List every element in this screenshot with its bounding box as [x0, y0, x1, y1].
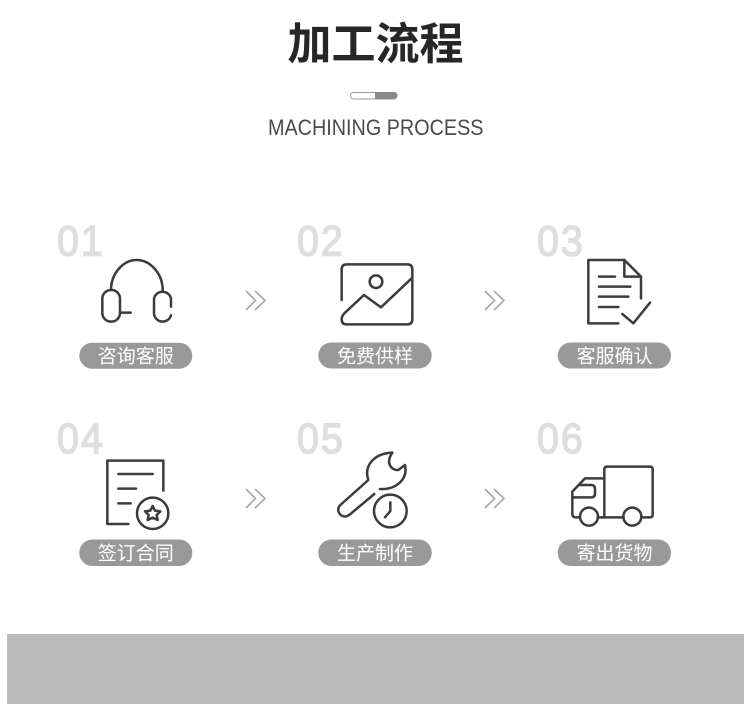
step number: 06: [537, 414, 585, 462]
label pill: [558, 540, 671, 566]
step number: 01: [57, 217, 105, 265]
step 05: production: [297, 414, 432, 566]
step 04: sign contract: [57, 414, 192, 566]
label pill: 生产制作: [337, 542, 413, 564]
arrow: [246, 489, 265, 508]
step 02: free sample: [297, 217, 432, 368]
bottom grey band: [7, 634, 744, 704]
label pill: [558, 342, 671, 368]
label pill: 寄出货物: [576, 542, 653, 564]
step 01: customer service: [57, 217, 192, 369]
label pill: 咨询客服: [98, 346, 174, 368]
arrow: [246, 291, 265, 310]
label pill: 签订合同: [98, 542, 174, 564]
step 03: service confirmation: [537, 217, 671, 368]
title: 加工流程: [288, 20, 464, 69]
step number: 04: [57, 414, 105, 462]
label pill: 免费供样: [337, 346, 413, 368]
arrow: [485, 291, 504, 310]
step number: 05: [297, 414, 345, 462]
label pill: [318, 342, 432, 368]
step 06: shipping: [537, 414, 671, 566]
slider divider: [350, 92, 398, 99]
icon: truck: [572, 467, 653, 526]
subtitle: MACHINING PROCESS: [268, 115, 484, 140]
icon: document with check: [588, 260, 650, 323]
label pill: [318, 540, 432, 566]
label pill: [79, 343, 192, 369]
icon: headset: [102, 260, 171, 322]
icon: wrench and clock: [338, 453, 407, 527]
step number: 03: [537, 217, 585, 265]
label pill: 客服确认: [576, 346, 653, 368]
arrow: [485, 489, 504, 508]
step number: 02: [297, 217, 345, 265]
icon: picture: [342, 264, 412, 324]
label pill: [79, 540, 192, 566]
icon: contract with star seal: [107, 461, 168, 529]
